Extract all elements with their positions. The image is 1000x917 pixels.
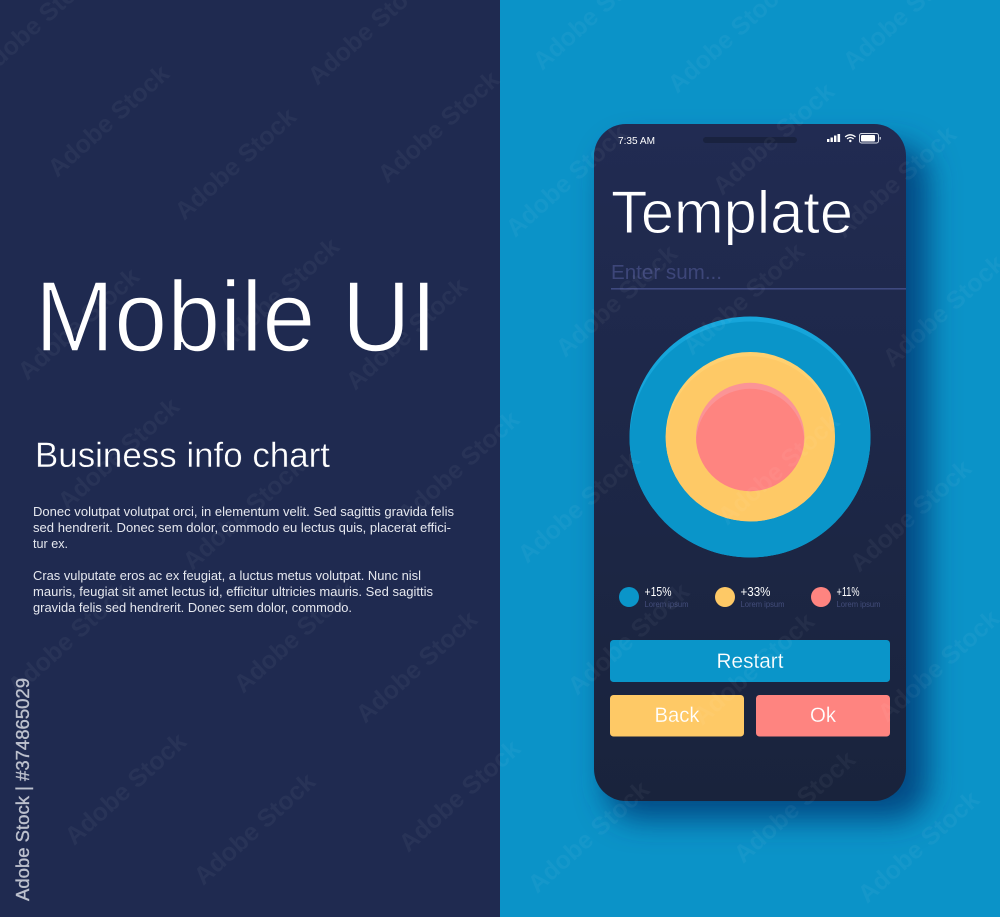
input underline xyxy=(611,288,906,290)
text block: first paragraph: tur ex. xyxy=(33,537,68,551)
watermarks: Adobe Stock xyxy=(341,272,473,396)
text block: second paragraph: Cras vulputate eros ac ex feugiat, a luctus metus volutpat. Nunc nisl xyxy=(33,569,421,583)
phone screen body xyxy=(594,124,906,801)
status bar xyxy=(618,134,881,147)
title: Mobile UI: Mobile UI xyxy=(35,261,437,373)
watermarks: Adobe Stock xyxy=(43,59,175,183)
watermarks: Adobe Stock xyxy=(373,65,505,189)
legend item: +15%: +15% xyxy=(644,584,672,599)
icon: signal bars xyxy=(827,134,840,142)
watermarks: Adobe Stock xyxy=(13,262,145,386)
watermarks: Adobe Stock xyxy=(713,407,845,531)
watermarks: Adobe Stock xyxy=(189,767,321,891)
watermarks: Adobe Stock xyxy=(830,120,962,244)
notch speaker xyxy=(703,137,797,143)
text block: first paragraph: Donec volutpat volutpat orci, in elementum velit. Sed sagittis gravida felis xyxy=(33,505,454,519)
button: Restart xyxy=(610,640,890,682)
watermarks: Adobe Stock xyxy=(513,445,645,569)
stock id vertical text: Adobe Stock | #374865029 xyxy=(13,678,33,901)
button: Back xyxy=(610,695,744,736)
watermarks: Adobe Stock xyxy=(351,605,483,729)
phone shadow xyxy=(606,145,928,819)
watermarks: Adobe Stock xyxy=(708,77,840,201)
panel: right blue background xyxy=(500,0,1000,917)
text block: first paragraph xyxy=(33,505,454,551)
icon: battery xyxy=(860,134,881,143)
input placeholder: Enter sum... xyxy=(611,262,722,284)
watermarks: Adobe Stock xyxy=(394,734,526,858)
watermarks: Adobe Stock xyxy=(393,405,525,529)
watermarks: Adobe Stock xyxy=(60,727,192,851)
text block: second paragraph: mauris, feugiat sit amet lectus id, efficitur ultricies mauris. Sed sagittis xyxy=(33,585,433,599)
watermarks: Adobe Stock xyxy=(178,452,310,576)
watermarks: Adobe Stock xyxy=(170,102,302,226)
legend xyxy=(619,584,881,609)
icon: wifi xyxy=(846,135,855,142)
legend item: +11%: +11% xyxy=(836,584,860,599)
legend item: +11% xyxy=(811,584,881,609)
button: Ok xyxy=(756,695,890,736)
watermarks: Adobe Stock xyxy=(523,775,655,899)
legend item: +15%: Lorem ipsum xyxy=(644,600,689,609)
heading: Template: Template xyxy=(611,179,853,246)
watermarks: Adobe Stock xyxy=(551,239,683,363)
status time: 7:35 AM xyxy=(618,135,655,147)
legend item: +33%: Lorem ipsum xyxy=(740,600,785,609)
watermarks: Adobe Stock xyxy=(229,575,361,699)
subtitle: Business info chart: Business info chart xyxy=(35,436,330,475)
panel: left text content xyxy=(33,261,454,615)
legend item: +11%: Lorem ipsum xyxy=(836,600,881,609)
panel: left navy background xyxy=(0,0,500,917)
legend item: +15% xyxy=(619,584,689,609)
watermarks: Adobe Stock xyxy=(53,392,185,516)
chart: concentric circles xyxy=(625,312,875,562)
watermarks: Adobe Stock xyxy=(845,454,977,578)
watermarks: Adobe Stock xyxy=(729,745,861,869)
button: Ok: Ok xyxy=(810,704,836,727)
inner coral circle xyxy=(696,382,804,492)
watermarks: Adobe Stock xyxy=(501,119,633,243)
button: Restart: Restart xyxy=(716,650,784,673)
watermarks: Adobe Stock xyxy=(688,607,820,731)
text block: second paragraph: gravida felis sed hendrerit. Donec sem dolor, commodo. xyxy=(33,601,352,615)
legend item: +33%: +33% xyxy=(740,584,771,599)
text block: second paragraph xyxy=(33,569,433,615)
outer blue circle xyxy=(625,312,875,562)
watermarks: Adobe Stock xyxy=(678,237,810,361)
watermarks: Adobe Stock xyxy=(853,785,985,909)
text block: first paragraph: sed hendrerit. Donec sem dolor, commodo eu lectus quis, placerat effici- xyxy=(33,521,451,535)
legend item: +33% xyxy=(715,584,785,609)
middle yellow circle xyxy=(666,352,835,522)
watermarks: Adobe Stock xyxy=(563,577,695,701)
watermarks: Adobe Stock xyxy=(3,577,135,701)
phone xyxy=(594,124,906,801)
watermarks: Adobe Stock xyxy=(213,232,345,356)
button: Back: Back xyxy=(654,704,700,727)
